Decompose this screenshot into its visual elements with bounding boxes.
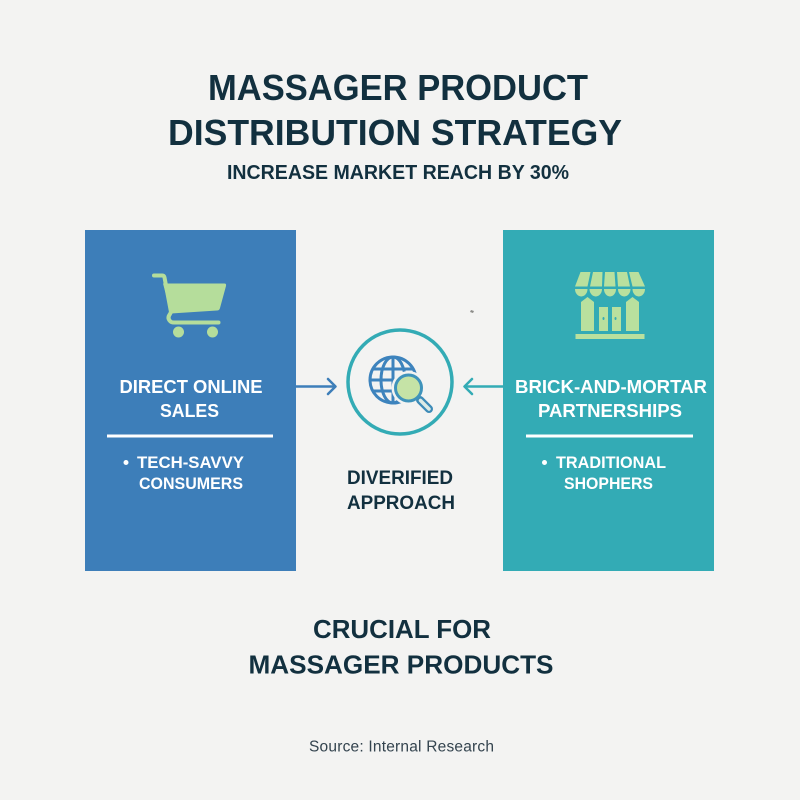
closing statement: MASSAGER PRODUCTS <box>248 650 554 680</box>
panel heading <box>515 376 707 421</box>
center label: APPROACH <box>347 493 455 514</box>
source: Source: Internal Research <box>309 738 494 756</box>
bullet text <box>542 454 666 493</box>
bullet text: CONSUMERS <box>139 475 243 493</box>
arrow: online to center <box>296 379 336 394</box>
panel heading: DIRECT ONLINE <box>120 376 262 397</box>
panel: brick-and-mortar partnerships <box>503 230 714 571</box>
title: DISTRIBUTION STRATEGY <box>168 112 622 153</box>
title: MASSAGER PRODUCT <box>208 67 588 108</box>
panel heading: SALES <box>160 400 219 421</box>
arrow: retail to center <box>464 379 503 394</box>
bullet text: TRADITIONAL <box>556 454 666 472</box>
subtitle: INCREASE MARKET REACH BY 30% <box>227 162 569 184</box>
panel heading <box>120 376 262 421</box>
panel: direct online sales <box>85 230 296 571</box>
closing statement <box>248 614 554 680</box>
bullet text: TECH-SAVVY <box>137 454 244 472</box>
panel heading: PARTNERSHIPS <box>538 400 682 421</box>
bullet text: SHOPHERS <box>564 475 653 493</box>
icon: storefront <box>575 272 645 339</box>
icon: globe with magnifier <box>348 330 452 434</box>
center label <box>347 468 455 514</box>
title <box>168 67 622 153</box>
bullet text <box>124 454 244 493</box>
center label: DIVERIFIED <box>347 468 453 489</box>
panel heading: BRICK-AND-MORTAR <box>515 376 707 397</box>
icon: shopping cart <box>154 276 226 338</box>
closing statement: CRUCIAL FOR <box>313 614 491 644</box>
